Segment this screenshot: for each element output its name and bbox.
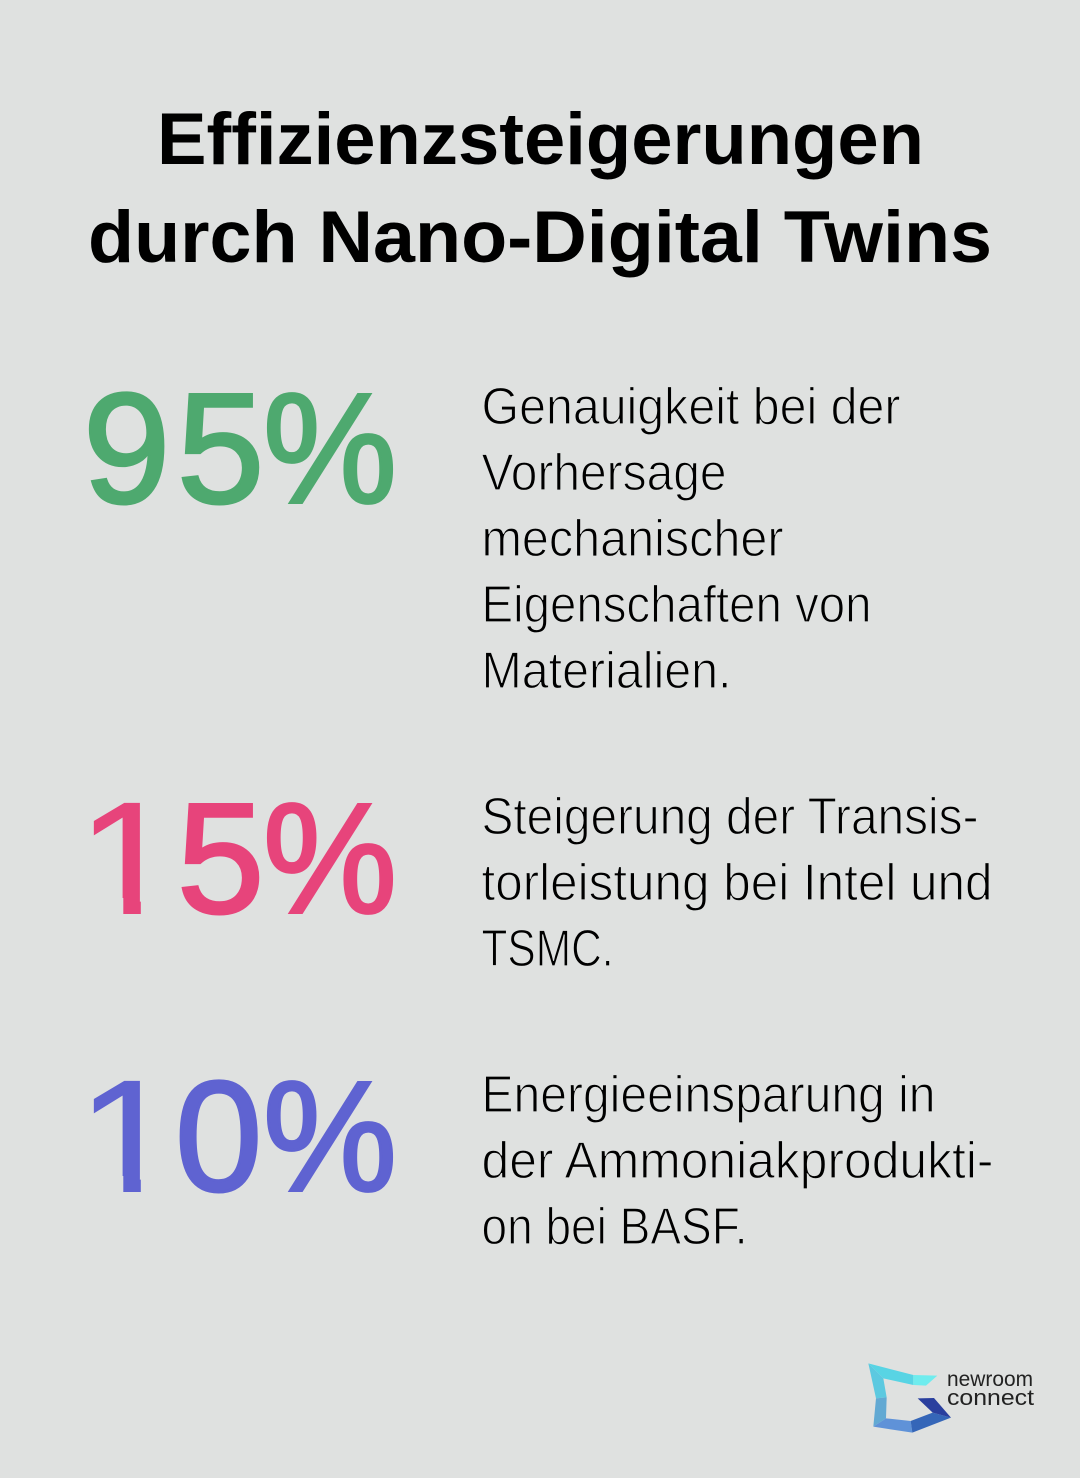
stat: 15% <box>60 769 992 978</box>
stat value: 95%: % <box>263 362 397 536</box>
stat description: 10%: on bei BASF. <box>482 1198 748 1256</box>
stat description: 95%: Genauigkeit bei der <box>482 378 900 436</box>
stat description: 10%: Energieeinsparung in <box>482 1066 936 1124</box>
stat description: 10%: der Ammoniakprodukti- <box>482 1132 994 1190</box>
stat description: 95%: Materialien. <box>482 642 732 700</box>
stat value: 95%: 9 <box>83 362 170 536</box>
stat value: 10%: % <box>263 1050 397 1224</box>
stat description: 95%: mechanischer <box>482 510 784 568</box>
stat description: 15%: Steigerung der Transis- <box>482 788 978 846</box>
stat description: 15%: torleistung bei Intel und <box>482 854 992 912</box>
stat description: 95%: Vorhersage <box>482 444 726 502</box>
stat value: 15%: % <box>263 772 397 946</box>
title: Effizienzsteigerungen <box>157 99 924 180</box>
stat description: 10% <box>482 1066 994 1256</box>
stat value: 15% <box>60 769 397 949</box>
stat: 95% <box>83 362 900 700</box>
logo wordmark <box>947 1368 1034 1410</box>
stat description: 95% <box>482 378 900 700</box>
stat value: 15%: 5 <box>177 772 264 946</box>
stat value: 15%: 1 <box>76 769 180 949</box>
stat: 10% <box>60 1047 994 1256</box>
icon: logo mark <box>868 1363 951 1433</box>
title <box>88 99 992 278</box>
stat description: 15%: TSMC. <box>482 920 614 978</box>
logo wordmark: newroom <box>947 1368 1033 1391</box>
stat value: 95% <box>83 362 397 536</box>
stat value: 10%: 0 <box>175 1050 262 1224</box>
stat value: 10%: 1 <box>76 1047 180 1227</box>
stat value: 10% <box>60 1047 397 1227</box>
stat description: 15% <box>482 788 992 978</box>
logo: newroom connect <box>868 1363 1034 1433</box>
title: durch Nano-Digital Twins <box>88 197 992 278</box>
stat value: 95%: 5 <box>177 362 264 536</box>
logo wordmark: connect <box>947 1385 1034 1410</box>
stat description: 95%: Eigenschaften von <box>482 576 872 634</box>
